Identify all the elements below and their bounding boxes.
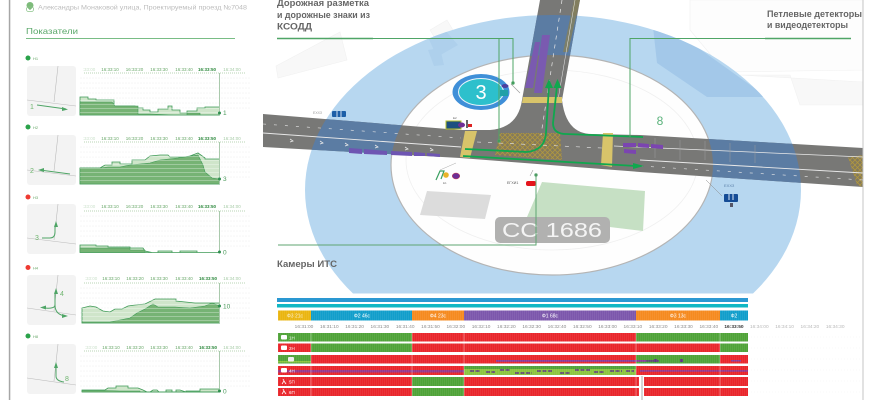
indicator H4: 10 — [223, 304, 231, 310]
row 2H: 2Н — [289, 346, 295, 351]
row 6P: 6П — [289, 390, 295, 395]
time axis: 16:31:00 — [295, 324, 314, 330]
time axis: 16:32:50 — [573, 324, 592, 330]
purple lane detectors west — [349, 148, 440, 157]
indicator H4: :33:00 — [85, 276, 98, 281]
zone number 8: 8 — [657, 114, 664, 128]
indicator H4: 16:33:10 — [102, 276, 120, 281]
time axis: 16:32:40 — [548, 324, 567, 330]
indicator H3: 3 — [35, 235, 39, 242]
indicator H3: 16:33:20 — [126, 204, 144, 209]
camera west — [313, 111, 346, 117]
zone number circle 3 — [452, 74, 520, 110]
zone number circle 3: 3 — [475, 82, 487, 104]
time axis: 16:33:20 — [649, 324, 668, 330]
phase bar: Ф1 68с — [542, 314, 559, 320]
time axis — [295, 324, 845, 330]
background building footprints — [276, 0, 863, 105]
camera west: ЕХХЗ — [313, 111, 322, 115]
indicator H8: 8 — [65, 376, 69, 383]
indicator H1: 16:33:10 — [101, 67, 119, 72]
indicator H3: :33:00 — [83, 204, 96, 209]
row 6P — [278, 388, 748, 396]
callout leader: cameras — [278, 174, 537, 245]
time axis: 16:33:00 — [598, 324, 617, 330]
indicator H8: 16:34:00 — [223, 345, 241, 350]
time axis: 16:33:50 — [724, 324, 744, 330]
time axis: 16:33:40 — [699, 324, 718, 330]
lane lines — [263, 0, 863, 180]
indicator H2: 16:33:10 — [101, 136, 119, 141]
corner hatch at the far right — [848, 155, 863, 187]
section rule — [26, 38, 235, 39]
phase bar: Ф4 23с — [430, 314, 447, 320]
indicator H4: 16:33:40 — [175, 276, 193, 281]
panel: indicators — [0, 0, 263, 400]
indicator H3: 16:34:00 — [223, 204, 241, 209]
address row — [26, 2, 247, 12]
row 1H: 1Н — [289, 336, 295, 340]
row 1H — [278, 333, 748, 342]
time axis: 16:31:40 — [396, 324, 415, 330]
indicator H1 — [26, 56, 250, 117]
row 3H — [278, 355, 748, 364]
address row: Александры Монаковой улица, Проектируемый проезд №7048 — [38, 4, 247, 12]
indicator H1: :33:00 — [83, 67, 96, 72]
row 5P: 5П — [289, 380, 295, 384]
time axis: 16:31:50 — [421, 324, 440, 330]
signs near west crosswalk — [446, 116, 472, 129]
indicator H2: 16:33:40 — [175, 136, 193, 141]
future grid lines — [748, 337, 860, 392]
row 4H — [278, 366, 748, 375]
heading: detectors callout — [767, 9, 862, 30]
purple lane detectors north — [525, 35, 550, 93]
indicator H1: 16:34:00 — [223, 67, 241, 72]
indicator H1: 16:33:40 — [175, 67, 193, 72]
indicator H1: 16:33:30 — [150, 67, 168, 72]
camera south red — [507, 170, 536, 186]
indicator H8: :33:00 — [85, 345, 98, 350]
time axis: 16:34:30 — [826, 324, 845, 330]
indicator H8: 16:33:40 — [175, 345, 193, 350]
top cycle bars — [277, 298, 748, 308]
time axis: 16:31:30 — [371, 324, 390, 330]
panel: intersection map — [263, 0, 862, 294]
indicator H8: 16:33:30 — [150, 345, 168, 350]
indicator H1: 16:33:20 — [126, 67, 144, 72]
indicator H2 — [26, 124, 250, 185]
indicator H3: 16:33:50 — [198, 204, 217, 209]
inner faint contour — [406, 70, 698, 250]
road network — [263, 0, 863, 187]
indicator H1: 1 — [30, 104, 34, 111]
indicator H4 — [26, 265, 250, 325]
callout leader: road markings — [277, 38, 514, 142]
label СС 1686: CC 1686 — [502, 220, 602, 242]
heading: road markings callout: КСОДД — [277, 22, 313, 32]
indicator H2: Н2 — [33, 125, 39, 130]
row 4H: 4Н — [289, 368, 295, 374]
time axis: 16:33:30 — [674, 324, 693, 330]
phase bar: Ф3 21с — [287, 314, 304, 320]
label zone green area — [527, 182, 645, 231]
inner zone border — [391, 55, 713, 275]
phase bar: Ф2 46с — [354, 314, 371, 320]
indicator H3: 0 — [223, 250, 227, 256]
signs south-west — [436, 163, 460, 185]
indicator H4: 16:33:20 — [126, 276, 144, 281]
indicator H2: 3 — [223, 176, 227, 183]
arrowheads — [545, 79, 644, 169]
camera south red: ЕГХИ1 — [507, 181, 518, 185]
time axis: 16:32:00 — [446, 324, 465, 330]
indicator H8: Н8 — [33, 334, 39, 339]
blue detection zone ring — [305, 15, 801, 365]
indicator H2: 16:33:20 — [126, 136, 144, 141]
heading: detectors callout: Петлевые детекторы — [767, 9, 862, 19]
indicator H2: :33:00 — [83, 136, 96, 141]
north road ochre edge — [563, 0, 580, 52]
indicator H4: 16:33:30 — [150, 276, 168, 281]
time axis: 16:31:20 — [345, 324, 364, 330]
crosswalks — [460, 97, 613, 167]
indicator H3 — [26, 194, 250, 256]
indicator H4: 16:34:00 — [223, 276, 241, 281]
time axis: 16:34:20 — [801, 324, 820, 330]
indicator H4: Н4 — [33, 266, 39, 270]
indicator H1: Н1 — [33, 56, 39, 61]
indicator H2: 16:33:30 — [150, 136, 168, 141]
indicator H1: 16:33:50 — [198, 67, 217, 72]
east road detector grid — [655, 138, 755, 163]
indicator H4: 4 — [60, 291, 64, 298]
indicator H8 — [26, 334, 250, 396]
time axis: 16:34:10 — [775, 324, 794, 330]
indicator H8: 16:33:20 — [126, 345, 144, 350]
darker building overlay on ring — [427, 27, 767, 97]
phase bar — [278, 310, 748, 320]
time axis: 16:34:00 — [750, 324, 769, 330]
callout leader: detectors — [630, 38, 851, 137]
indicator H3: 16:33:40 — [175, 204, 193, 209]
indicator H2: 16:33:50 — [198, 136, 217, 141]
indicator H2: 16:34:00 — [223, 136, 241, 141]
indicator H8: 16:33:50 — [199, 345, 218, 350]
row 5P — [278, 377, 748, 386]
label СС 1686 — [495, 217, 610, 243]
purple lane detectors east — [623, 143, 663, 154]
indicator H8: 16:33:10 — [102, 345, 120, 350]
phase bar: Ф2 — [731, 314, 738, 320]
camera east blue — [706, 180, 738, 207]
heading: road markings callout: и дорожные знаки из — [277, 10, 371, 20]
signs near west crosswalk: E2 — [453, 116, 457, 120]
camera east blue: ЕХХЗ — [724, 183, 735, 188]
indicator H4: 16:33:50 — [199, 276, 218, 281]
section title: Показатели — [26, 26, 78, 36]
indicator H2: 2 — [30, 168, 34, 175]
time axis: 16:32:10 — [472, 324, 491, 330]
heading: road markings callout — [277, 0, 371, 32]
indicator H8: 0 — [223, 388, 227, 396]
indicator H1: 1 — [223, 110, 227, 117]
heading: detectors callout: и видеодетекторы — [767, 20, 848, 30]
row 2H — [278, 344, 748, 352]
indicator H3: 16:33:30 — [150, 204, 168, 209]
grey building — [420, 191, 491, 219]
signal rows — [278, 333, 748, 396]
time axis: 16:33:10 — [624, 324, 643, 330]
phase boundary lines — [311, 333, 720, 396]
indicator H3: 16:33:10 — [101, 204, 119, 209]
panel: signal timeline — [270, 294, 863, 400]
signs south-west: E1 — [443, 181, 447, 185]
heading: cameras: Камеры ИТС — [277, 259, 338, 269]
phase bar: Ф3 13с — [670, 314, 687, 320]
current time cursor — [639, 376, 644, 400]
indicator H3: Н3 — [33, 195, 39, 200]
green movement arrows — [463, 86, 643, 166]
time axis: 16:32:20 — [497, 324, 516, 330]
row grain texture — [278, 310, 748, 396]
time axis: 16:31:10 — [320, 324, 339, 330]
time axis: 16:32:30 — [522, 324, 541, 330]
intersection hatching — [495, 133, 562, 160]
